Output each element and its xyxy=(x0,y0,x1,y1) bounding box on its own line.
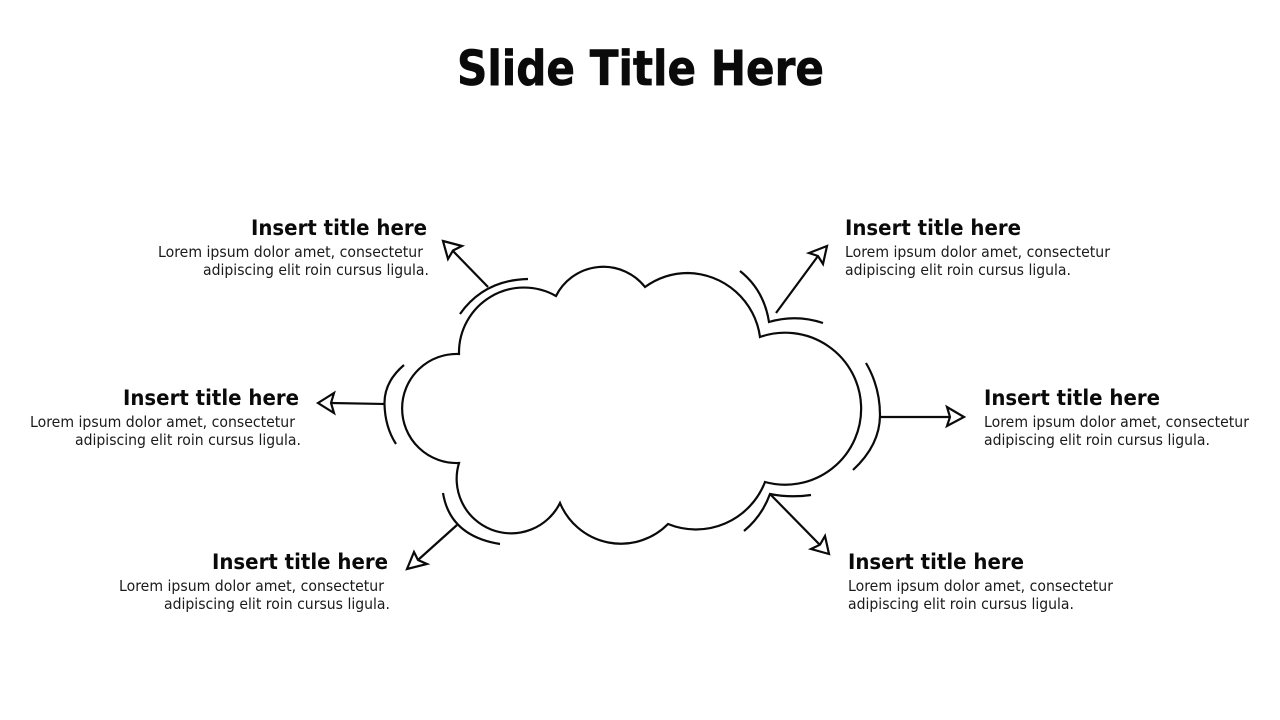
top left outer arc xyxy=(460,279,528,314)
middle left heading: Insert title here xyxy=(123,386,299,410)
top right body text: Lorem ipsum dolor amet, consectetur xyxy=(845,243,1111,261)
top left heading: Insert title here xyxy=(251,216,427,240)
bottom right body text: Lorem ipsum dolor amet, consectetur xyxy=(848,577,1114,595)
panel: bottom left xyxy=(119,493,500,613)
middle right arrow xyxy=(880,407,964,426)
middle left body text xyxy=(30,413,301,449)
top left body text: Lorem ipsum dolor amet, consectetur xyxy=(158,243,424,261)
bottom right body text xyxy=(848,577,1114,613)
bottom right heading: Insert title here xyxy=(848,550,1024,574)
panel: middle right xyxy=(853,363,1250,470)
panel: middle left xyxy=(30,365,404,449)
middle left body text: adipiscing elit roin cursus ligula. xyxy=(75,431,301,449)
panel: bottom right xyxy=(744,494,1114,613)
panel: top left xyxy=(158,216,528,314)
bottom left arrow xyxy=(407,525,457,569)
bottom right arrow xyxy=(770,494,829,554)
bottom left outer arc xyxy=(443,493,500,544)
middle right heading: Insert title here xyxy=(984,386,1160,410)
top left body text: adipiscing elit roin cursus ligula. xyxy=(203,261,429,279)
top right arrow xyxy=(776,246,827,313)
title: Slide Title Here xyxy=(457,41,824,97)
cloud outline xyxy=(402,267,861,544)
bottom left heading: Insert title here xyxy=(212,550,388,574)
top right body text: adipiscing elit roin cursus ligula. xyxy=(845,261,1071,279)
middle right outer arc xyxy=(853,363,880,470)
middle right body text: Lorem ipsum dolor amet, consectetur xyxy=(984,413,1250,431)
panel: top right xyxy=(740,216,1111,323)
top right heading: Insert title here xyxy=(845,216,1021,240)
middle left outer arc xyxy=(384,365,404,444)
middle left arrow xyxy=(318,393,384,413)
top right body text xyxy=(845,243,1111,279)
top left body text xyxy=(158,243,429,279)
top left arrow xyxy=(443,241,488,287)
bottom left body text: adipiscing elit roin cursus ligula. xyxy=(164,595,390,613)
bottom right outer arc xyxy=(744,494,811,531)
bottom left body text: Lorem ipsum dolor amet, consectetur xyxy=(119,577,385,595)
bottom left body text xyxy=(119,577,390,613)
middle right body text: adipiscing elit roin cursus ligula. xyxy=(984,431,1210,449)
middle left body text: Lorem ipsum dolor amet, consectetur xyxy=(30,413,296,431)
bottom right body text: adipiscing elit roin cursus ligula. xyxy=(848,595,1074,613)
middle right body text xyxy=(984,413,1250,449)
top right outer arc xyxy=(740,271,823,323)
